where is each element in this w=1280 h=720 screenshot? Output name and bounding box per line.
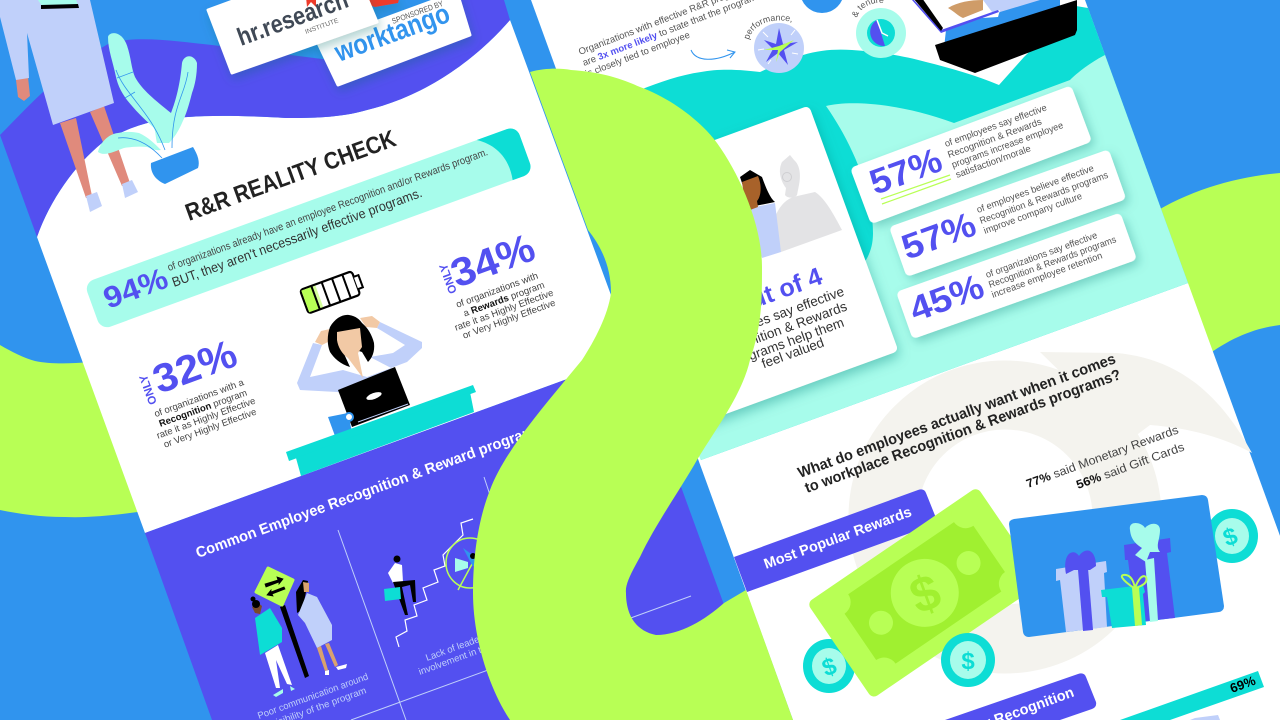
stat: only 32 percent: Recognition program — [158, 388, 249, 430]
tag: most popular recognition — [902, 673, 1096, 720]
card: 45 percent retention: of organizations say effective — [984, 230, 1099, 281]
callout: 94 percent bar: 94% — [99, 262, 172, 316]
panel: common recognition challenges — [145, 355, 766, 720]
card text: employees say effective — [706, 284, 846, 347]
icon: coin right: $ — [1220, 522, 1242, 552]
text: 3x more likely: is closely tied to employee — [584, 30, 692, 80]
stat: only 32 percent: ONLY — [138, 373, 160, 406]
card: 57 percent culture: 57% — [896, 205, 981, 268]
logo card: hr research — [208, 0, 470, 85]
stats: popular rewards: 77% said Monetary Rewards — [1024, 423, 1180, 491]
icon: performance star: performance, — [744, 16, 792, 40]
stat: only 34 percent: 34% — [445, 226, 541, 296]
stat: only 34 percent: rate it as Highly Effective — [453, 288, 555, 334]
card: 3 out of 4 — [614, 112, 892, 418]
icon: gift card — [1009, 495, 1224, 637]
stat: only 32 percent: rate it as Highly Effective — [155, 396, 257, 442]
stat: only 34 percent — [438, 226, 557, 342]
bar: 69 percent: 69% — [1228, 673, 1258, 696]
tag: most popular rewards: Most Popular Rewards — [762, 504, 914, 573]
card: 57 percent morale: of employees say effective — [943, 103, 1049, 150]
stat: 3 out of 4: 3 out of 4 — [712, 262, 826, 327]
callout: 94 percent bar — [84, 126, 533, 330]
panel title: Common Employee Recognition & Reward programs — [194, 420, 545, 562]
desk — [286, 385, 476, 461]
icon: tenure clock — [852, 0, 906, 58]
caption: lack of leadership: Lack of leadership — [424, 627, 500, 664]
icon: banknote — [807, 487, 1043, 699]
illustration: stressed woman at laptop — [286, 315, 476, 476]
icon: low battery — [300, 269, 365, 313]
pale watermark ring — [883, 352, 1252, 639]
stat: only 32 percent: 32% — [147, 332, 243, 402]
illustration: road sign with two people — [250, 568, 347, 697]
card: 57 percent culture: Recognition & Rewards programs — [978, 170, 1110, 227]
heading: R&R reality check: R&R REALITY CHECK — [182, 125, 400, 227]
heading: what do employees want: What do employees actually want when it comes — [796, 351, 1118, 482]
stat: only 32 percent: of organizations with a — [153, 377, 246, 420]
stat: only 32 percent — [138, 332, 258, 451]
illustration: standing woman — [0, 0, 138, 212]
icon: mug — [328, 413, 352, 436]
teal wave band — [640, 6, 1188, 460]
card: 57 percent morale: programs increase employee — [950, 120, 1065, 171]
page body — [531, 0, 1280, 720]
icon: blue circle — [800, 0, 844, 13]
card text: feel valued — [760, 335, 826, 371]
stat: only 34 percent: a Rewards program — [462, 280, 546, 319]
panel background — [145, 355, 766, 720]
illustration: climbing stairs — [384, 519, 494, 647]
illustration: two people — [740, 155, 842, 258]
card: 57 percent morale — [850, 85, 1092, 224]
icon: banknote: $ — [902, 563, 948, 625]
card: 57 percent morale: Recognition & Rewards — [946, 116, 1044, 161]
icon: coin left: $ — [819, 652, 841, 682]
icon: coin left — [803, 639, 855, 693]
heading: what do employees want: to workplace Recognition & Rewards programs? — [803, 366, 1123, 497]
card: 57 percent morale: satisfaction/morale — [954, 143, 1032, 181]
card: 57 percent culture — [889, 149, 1126, 277]
stats: popular rewards: 56% said Gift Cards — [1074, 440, 1186, 492]
card: 57 percent culture: of employees believe effective — [975, 163, 1096, 216]
card: 45 percent retention: increase employee retention — [990, 250, 1104, 301]
stat: only 34 percent: ONLY — [438, 262, 460, 295]
page body — [37, 20, 633, 533]
light aqua band — [680, 55, 1188, 460]
bar: 69 percent — [1120, 671, 1264, 720]
indigo header wave — [0, 0, 510, 237]
icon: performance star — [744, 16, 804, 73]
caption: lack of leadership: involvement in the program — [417, 628, 529, 678]
icon: coin right — [1206, 509, 1258, 563]
card: 45 percent retention: 45% — [904, 267, 989, 330]
illustration: plant — [98, 33, 199, 184]
card: 57 percent culture: improve company culture — [982, 191, 1084, 237]
card: 57 percent morale: 57% — [864, 141, 947, 203]
stat: only 32 percent: or Very Highly Effective — [162, 407, 258, 451]
stat: only 34 percent: of organizations with — [455, 271, 540, 311]
tag: most popular rewards — [734, 489, 936, 592]
card: 45 percent retention: Recognition & Rewards programs — [987, 234, 1118, 291]
arrow — [691, 50, 735, 59]
illustration: laptop with hand — [912, 0, 1077, 73]
panel: right infographic page — [531, 0, 1280, 720]
card text: programs help them — [728, 315, 846, 370]
icon: coin centre — [941, 633, 995, 687]
callout: 94 percent bar: BUT, they aren't necessarily effective programs. — [170, 185, 424, 290]
callout: 94 percent bar: of organizations already have an employee Recognition and/or Rewards program. — [166, 146, 490, 274]
icon: coin centre: $ — [961, 648, 975, 675]
card: 45 percent retention — [896, 213, 1137, 339]
card text: Recognition & Rewards — [711, 299, 849, 361]
logo card: hr research: INSTITUTE — [304, 17, 340, 36]
green S ribbon — [473, 69, 793, 720]
stat: only 34 percent: or Very Highly Effective — [461, 298, 557, 342]
panel: left infographic page — [0, 0, 766, 720]
